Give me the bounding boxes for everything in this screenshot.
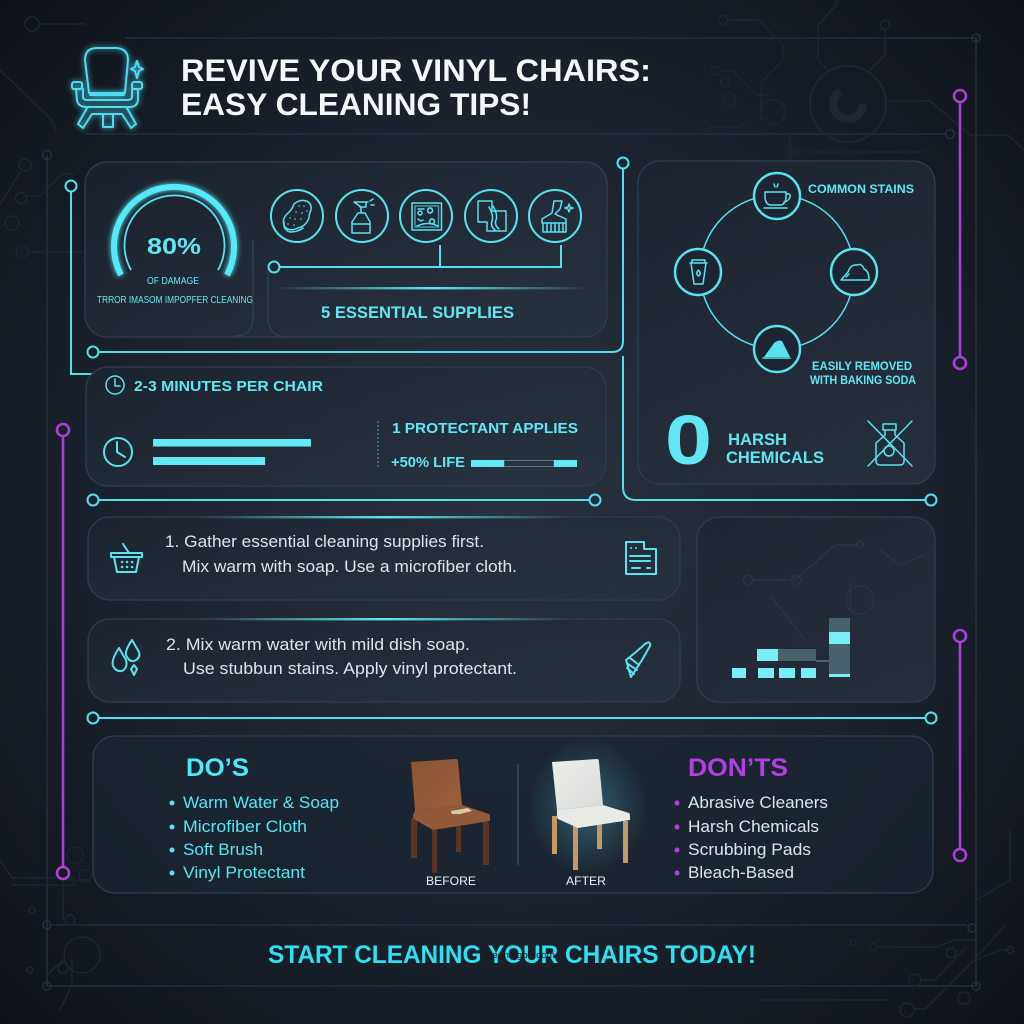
heading: don'ts: DON’TS [688,754,788,782]
photo: chair after [528,738,648,888]
stat: zero harsh chemicals [665,401,824,479]
icon: basket [111,544,142,572]
icon: sponge [271,190,323,242]
panel: bar chart [697,517,935,702]
panel: time and protectant [86,367,606,486]
connector: supplies bracket [268,245,561,272]
panel: stains and chemicals [638,161,935,484]
dotted divider [377,421,379,468]
photo: chair after: AFTER [566,876,606,888]
list: do's: Microfiber Cloth [183,817,307,836]
list: do's: Warm Water & Soap [183,793,339,812]
time bars [153,439,311,465]
icon: brush with sparkle [529,190,581,242]
icon: brush [626,642,650,677]
icon: water drops [113,640,139,675]
icon: neon chair [72,48,143,128]
icon: fabric [465,190,517,242]
list: do's [170,793,339,882]
divider [517,764,519,865]
icon: cloud stain [831,249,877,295]
panel: step 1 [88,516,680,600]
label: easily removed: EASILY REMOVED [812,361,912,373]
list: don'ts: Bleach-Based [688,863,794,882]
text: step 2: 2. Mix warm water with mild dish soap. [166,635,470,654]
stat: zero harsh chemicals: 0 [665,401,712,479]
panel: damage and supplies [85,162,607,337]
heading: do's: DO’S [186,754,249,782]
label: 50 percent life: +50% LIFE [391,454,465,471]
label: easily removed [810,361,916,387]
icon: crossed-out bottle [868,421,912,466]
icon: document [626,542,656,574]
gauge: 80 percent: TRROR IMASOM IMPOPFER CLEANING [97,295,253,306]
glow divider [275,287,590,289]
stat: zero harsh chemicals: HARSH [728,430,787,449]
title [181,52,651,122]
icon: coffee cup [754,173,800,219]
icon: large clock [104,438,132,466]
list: don'ts: Scrubbing Pads [688,840,811,859]
label: easily removed: WITH BAKING SODA [810,375,916,387]
heading: minutes per chair: 2-3 MINUTES PER CHAIR [134,378,323,395]
list: do's: Soft Brush [183,840,263,859]
text: step 1 [165,532,517,576]
icon: spray bottle [336,190,388,242]
gauge: 80 percent [97,187,253,306]
icon: baking soda pile [754,326,800,372]
list: don'ts [674,793,828,882]
photo: chair before [411,759,490,888]
label: 5 essential supplies: 5 ESSENTIAL SUPPLIES [321,304,514,322]
ring diagram [675,173,914,372]
panel: do's and don'ts [93,736,933,893]
list: don'ts: Harsh Chemicals [688,817,819,836]
gauge: 80 percent: OF DAMAGE [147,276,199,287]
bar chart bars [732,618,850,678]
list: don'ts: Abrasive Cleaners [688,793,828,812]
accent: purple lines [57,90,966,879]
label: common stains: COMMON STAINS [808,182,914,196]
icon: takeaway cup [675,249,721,295]
text: step 1: 1. Gather essential cleaning supplies first. [165,532,484,551]
text: step 2: Use stubbun stains. Apply vinyl protectant. [183,659,517,678]
label: protectant: 1 PROTECTANT APPLIES [392,420,578,437]
gauge: 80 percent: 80% [147,233,201,259]
stat: zero harsh chemicals: CHEMICALS [726,448,824,467]
progress bar [471,460,577,467]
panel: step 2 [88,618,680,702]
text: step 2 [166,635,517,678]
text: step 1: Mix warm with soap. Use a microfiber cloth. [182,557,517,576]
connector lines [66,158,936,724]
icon: stained cloth [400,190,452,242]
call to action: START CLEANING YOUR CHAIRS TODAY! [268,941,756,969]
list: do's: Vinyl Protectant [183,863,305,882]
title: EASY CLEANING TIPS! [181,86,531,122]
photo: chair before: BEFORE [426,876,476,888]
icon: small clock [106,376,124,394]
call to action: cleaningbo.com [485,950,555,960]
title: REVIVE YOUR VINYL CHAIRS: [181,52,651,88]
